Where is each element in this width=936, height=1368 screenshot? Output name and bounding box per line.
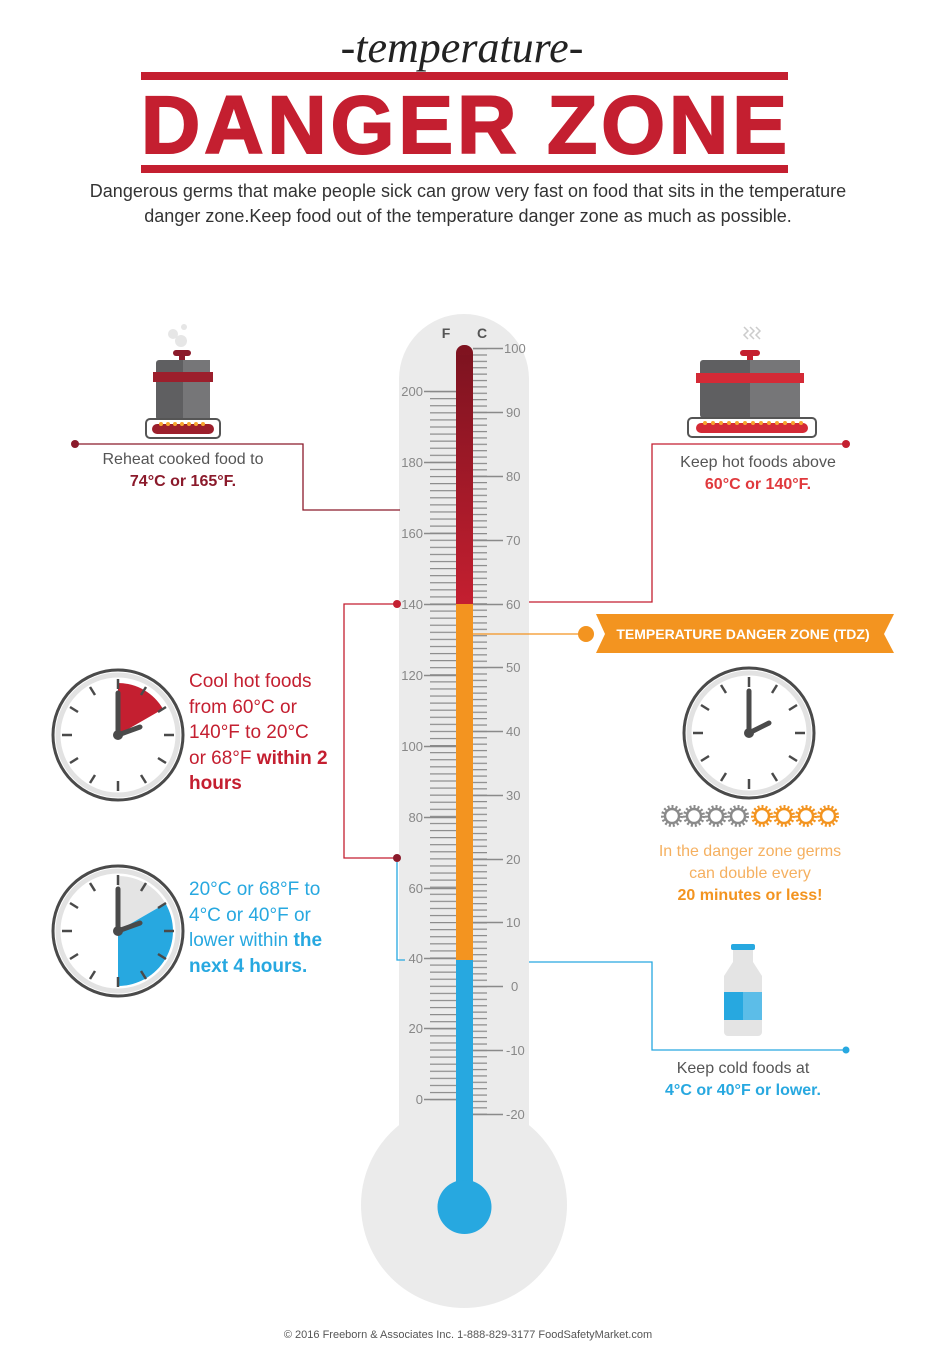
thermometer: 80 (409, 810, 423, 825)
banner: TDZ (596, 614, 894, 653)
thermometer: 20 (409, 1021, 423, 1036)
thermometer: 180 (401, 455, 423, 470)
title: temperature script: -temperature- (341, 23, 583, 72)
text: cool hot foods: 140°F to 20°C (189, 722, 309, 743)
thermometer: 70 (506, 533, 520, 548)
text: next 4 hours: lower within the (189, 930, 322, 951)
text: keep hot: 60°C or 140°F. (705, 476, 811, 493)
subtitle: danger zone.Keep food out of the temperature danger zone as much as possible. (144, 206, 792, 226)
title bars and DANGER ZONE: DANGER ZONE (141, 80, 791, 171)
thermometer: 160 (401, 526, 423, 541)
text: cool hot foods: or 68°F within 2 (189, 748, 328, 768)
thermometer: 90 (506, 405, 520, 420)
thermometer: 20 (506, 852, 520, 867)
thermometer: 0 (511, 979, 518, 994)
thermometer: 50 (506, 660, 520, 675)
text: reheat (102, 451, 264, 490)
text: next 4 hours: next 4 hours. (189, 956, 307, 976)
text: cool hot foods: Cool hot foods (189, 671, 312, 692)
thermometer: 40 (506, 724, 520, 739)
text: next 4 hours: 20°C or 68°F to (189, 879, 320, 900)
thermometer: 120 (401, 668, 423, 683)
connector lines (75, 444, 846, 1050)
thermometer: -20 (506, 1107, 525, 1122)
text: cool hot foods: hours (189, 773, 242, 794)
icon: pot left (146, 324, 220, 438)
icon: pot right (688, 327, 816, 437)
text: keep hot (680, 454, 836, 493)
text: cool hot foods (189, 671, 328, 794)
thermometer: 80 (506, 469, 520, 484)
thermometer: C (477, 325, 487, 341)
thermometer: F (442, 325, 451, 341)
text: reheat: 74°C or 165°F. (130, 473, 236, 490)
text: germs double: In the danger zone germs (659, 843, 841, 860)
thermometer: 140 (401, 597, 423, 612)
text: next 4 hours: 4°C or 40°F or (189, 904, 311, 926)
text: reheat: Reheat cooked food to (102, 451, 264, 468)
text: keep hot: Keep hot foods above (680, 454, 836, 471)
subtitle: Dangerous germs that make people sick can grow very fast on food that sits in the temperature (90, 181, 846, 201)
thermometer: -10 (506, 1043, 525, 1058)
banner: TDZ: TEMPERATURE DANGER ZONE (TDZ) (616, 626, 870, 642)
footer: © 2016 Freeborn & Associates Inc. 1-888-829-3177 FoodSafetyMarket.com (284, 1329, 652, 1341)
clock: cool 2 hours (53, 670, 183, 800)
icon: milk bottle (724, 944, 762, 1036)
subtitle (90, 181, 846, 226)
text: next 4 hours (189, 879, 322, 976)
thermometer: 60 (409, 881, 423, 896)
text: germs double: can double every (689, 865, 811, 882)
thermometer: 100 (504, 341, 526, 356)
text: germs double (659, 843, 841, 904)
thermometer: 0 (416, 1092, 423, 1107)
text: cool hot foods: from 60°C or (189, 696, 297, 718)
text: keep cold: 4°C or 40°F or lower. (665, 1082, 821, 1099)
thermometer: 10 (506, 915, 520, 930)
thermometer: 30 (506, 788, 520, 803)
thermometer: 40 (409, 951, 423, 966)
clock: right (684, 668, 814, 798)
clock: 4 hours (53, 866, 183, 996)
thermometer (361, 314, 567, 1308)
icon: germs (662, 806, 838, 826)
text: germs double: 20 minutes or less! (678, 887, 822, 904)
thermometer: 200 (401, 384, 423, 399)
thermometer: 60 (506, 597, 520, 612)
thermometer: 100 (401, 739, 423, 754)
text: keep cold: Keep cold foods at (677, 1060, 809, 1077)
text: keep cold (665, 1060, 821, 1099)
